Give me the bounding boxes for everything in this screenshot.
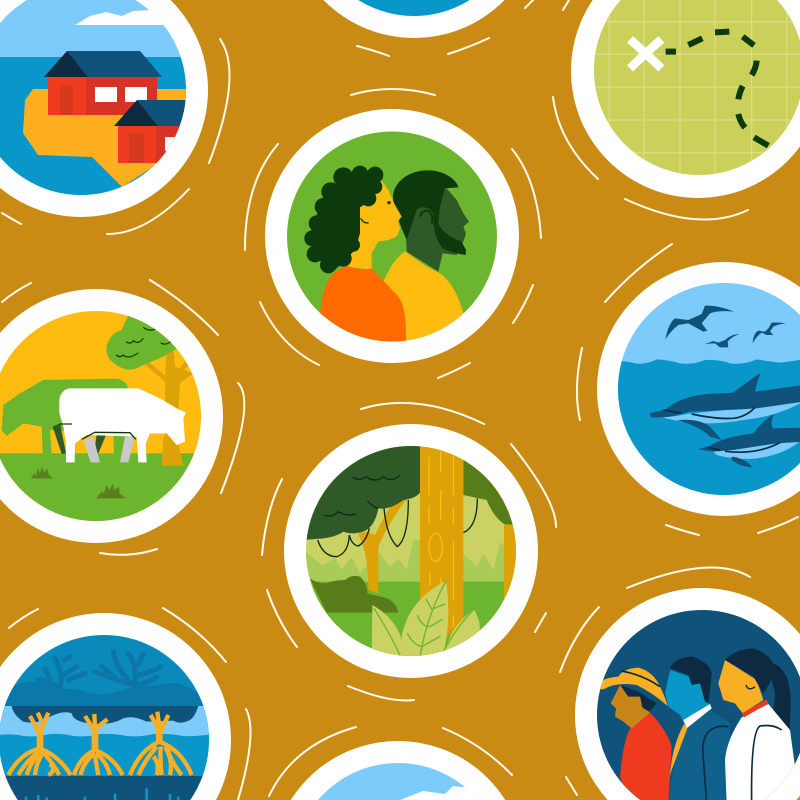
icon: cloud: [75, 10, 172, 25]
large leaves: [372, 581, 480, 660]
dolphin one: [649, 373, 800, 440]
panel: couple in profile: [265, 109, 519, 363]
main trunk: [420, 440, 463, 637]
right tree: [463, 460, 516, 600]
panel: coastal houses: [0, 0, 208, 217]
panel: mangrove: [0, 613, 231, 800]
panel: treasure map: [571, 0, 800, 198]
grass tufts: [31, 466, 126, 498]
curly hair: [304, 166, 383, 273]
man in suit: [665, 657, 730, 800]
small red house: [114, 100, 186, 163]
dark canopy: [303, 440, 421, 540]
woman in white coat: [718, 648, 800, 800]
white cow: [59, 388, 186, 462]
water: [610, 359, 800, 503]
bush: [310, 576, 398, 613]
seabed ridge: [0, 681, 213, 707]
icon: cloud: [400, 786, 500, 800]
sandy land: [23, 89, 195, 187]
water: [0, 734, 213, 777]
icon: white x mark: [630, 39, 661, 68]
panel: community group: [575, 588, 800, 800]
green cow: [2, 379, 128, 453]
sky band: [0, 706, 217, 739]
dolphin two: [698, 414, 800, 467]
woman: [304, 166, 406, 343]
big red house: [44, 51, 162, 115]
tree: [106, 315, 193, 466]
panel: rainforest: [284, 424, 538, 678]
mangrove canopy: [12, 706, 198, 724]
seagrass: [26, 788, 178, 800]
map grid: [590, 0, 800, 193]
panel: bottom sky circle: [271, 741, 525, 800]
far legs: [53, 423, 135, 462]
distant foliage: [303, 540, 520, 583]
man: [383, 170, 469, 353]
birds: [665, 306, 786, 347]
farmer with hat: [596, 668, 672, 800]
vines and canopy marks: [318, 475, 477, 557]
dashed trail: [666, 32, 768, 146]
sediment: [0, 776, 217, 800]
panel: grazing cattle: [0, 289, 223, 543]
mangrove roots: [8, 712, 192, 775]
panel: top water circle: [287, 0, 541, 38]
corals: [38, 652, 160, 688]
left tree: [358, 499, 407, 593]
panel: sea life: [597, 262, 800, 516]
